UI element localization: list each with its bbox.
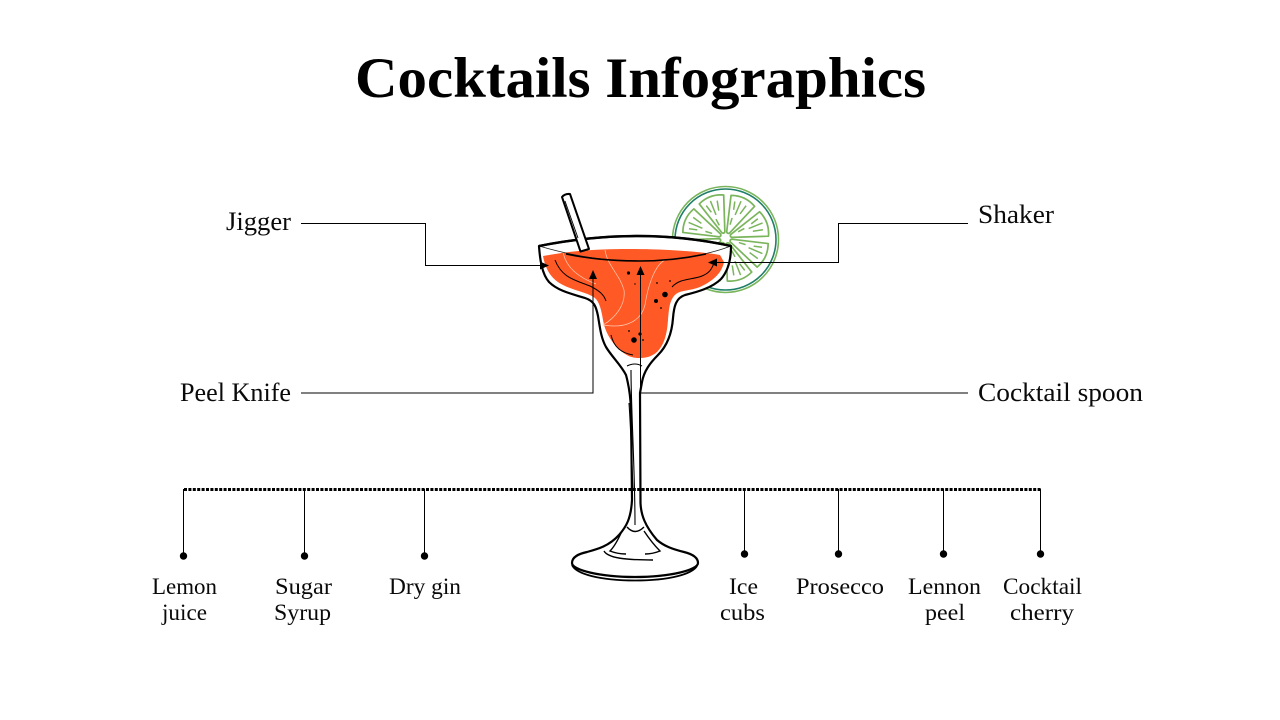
cocktail glass: [539, 236, 731, 580]
ingredient: Ice cubs: cubs: [720, 600, 765, 625]
ingredient: Dry gin: Dry gin: [389, 574, 461, 599]
ingredient: Lemon juice: juice: [161, 600, 207, 625]
ingredient: Prosecco: [796, 489, 884, 599]
title: Cocktails Infographics: [355, 47, 926, 110]
ingredient: Lemon juice: Lemon: [152, 574, 217, 599]
ingredient: Lennon peel: [908, 489, 982, 625]
liquid: [543, 249, 724, 358]
ingredient: Lennon peel: peel: [925, 600, 965, 625]
base lower rim: [572, 565, 697, 580]
callout: Peel Knife: Peel Knife: [180, 378, 291, 407]
icon: lime slice: [672, 186, 778, 292]
callout: Shaker: Shaker: [978, 200, 1054, 229]
ingredient: Cocktail cherry: cherry: [1010, 600, 1075, 625]
rim front: [539, 246, 731, 261]
ingredient: Ice cubs: Ice: [729, 574, 758, 599]
ingredient: Cocktail cherry: Cocktail: [1003, 574, 1082, 599]
glass bowl: [539, 236, 731, 577]
callout: Cocktail spoon: [636, 266, 1143, 407]
callout: Jigger: Jigger: [226, 207, 291, 236]
bubbles: [627, 271, 671, 343]
liquid highlights: [563, 250, 665, 326]
ingredient: Sugar Syrup: Sugar: [275, 574, 332, 599]
ingredient: Prosecco: Prosecco: [796, 574, 884, 599]
ingredient: Cocktail cherry: [1003, 489, 1082, 625]
callout: Peel Knife: [180, 270, 597, 407]
ingredient timeline: [152, 489, 1082, 625]
ingredient: Sugar Syrup: Syrup: [274, 600, 331, 625]
ingredient: Ice cubs: [720, 489, 765, 625]
stem inner lines: [627, 364, 642, 525]
ingredient: Lemon juice: [152, 489, 217, 625]
ingredient: Sugar Syrup: [274, 489, 332, 625]
callout: Cocktail spoon: Cocktail spoon: [978, 378, 1143, 407]
callout: Jigger: [226, 207, 549, 270]
icon: straw: [562, 194, 589, 252]
base details: [604, 527, 660, 560]
callout: Shaker: [708, 200, 1054, 266]
ingredient: Dry gin: [389, 489, 461, 599]
swirls: [555, 260, 714, 355]
ingredient: Lennon peel: Lennon: [908, 574, 982, 599]
